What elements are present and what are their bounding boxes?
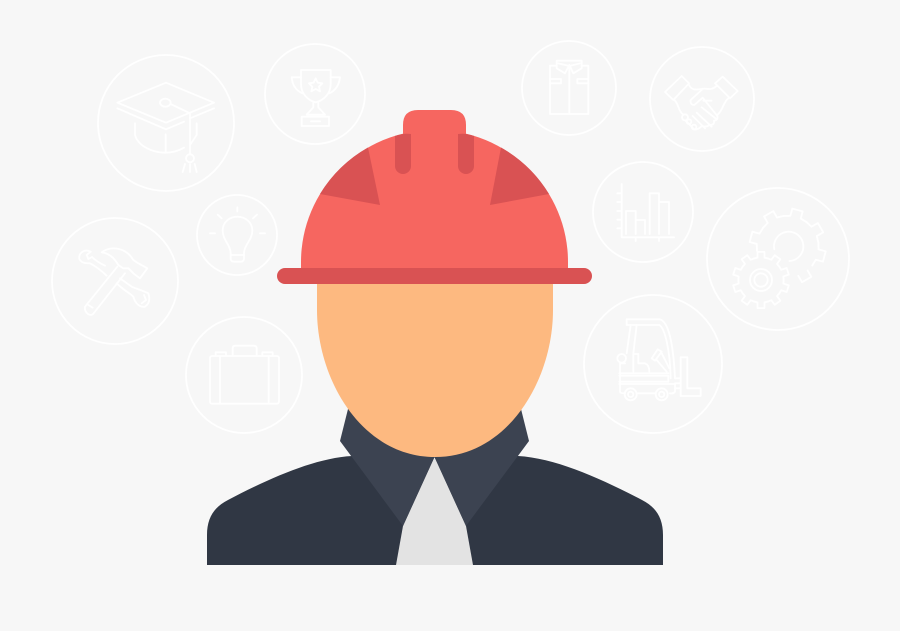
icon circle: bar chart (593, 162, 693, 262)
shirt collar (340, 409, 529, 526)
helmet brim (277, 268, 592, 284)
icon circle: handshake (650, 47, 754, 151)
icon circle: gears (707, 188, 849, 330)
suit jacket (207, 456, 663, 565)
tie (396, 457, 473, 565)
helmet top ridge (403, 110, 466, 140)
icon circle: forklift (584, 295, 722, 433)
left vent (320, 148, 380, 205)
large gear (748, 207, 827, 282)
worker figure (207, 110, 663, 565)
face (317, 280, 553, 457)
icon circle: trophy (265, 44, 365, 144)
right vent (490, 148, 549, 205)
icon circle: hammer and wrench (52, 218, 178, 344)
right slot (458, 134, 474, 174)
icon circle: shirt (522, 41, 616, 135)
helmet dome (301, 130, 568, 270)
left slot (395, 134, 411, 174)
icon circle: briefcase (186, 317, 302, 433)
small gear (732, 252, 790, 308)
icon circle: graduation cap (98, 55, 234, 191)
hard hat (277, 110, 592, 284)
icon circle: light bulb (197, 195, 277, 275)
